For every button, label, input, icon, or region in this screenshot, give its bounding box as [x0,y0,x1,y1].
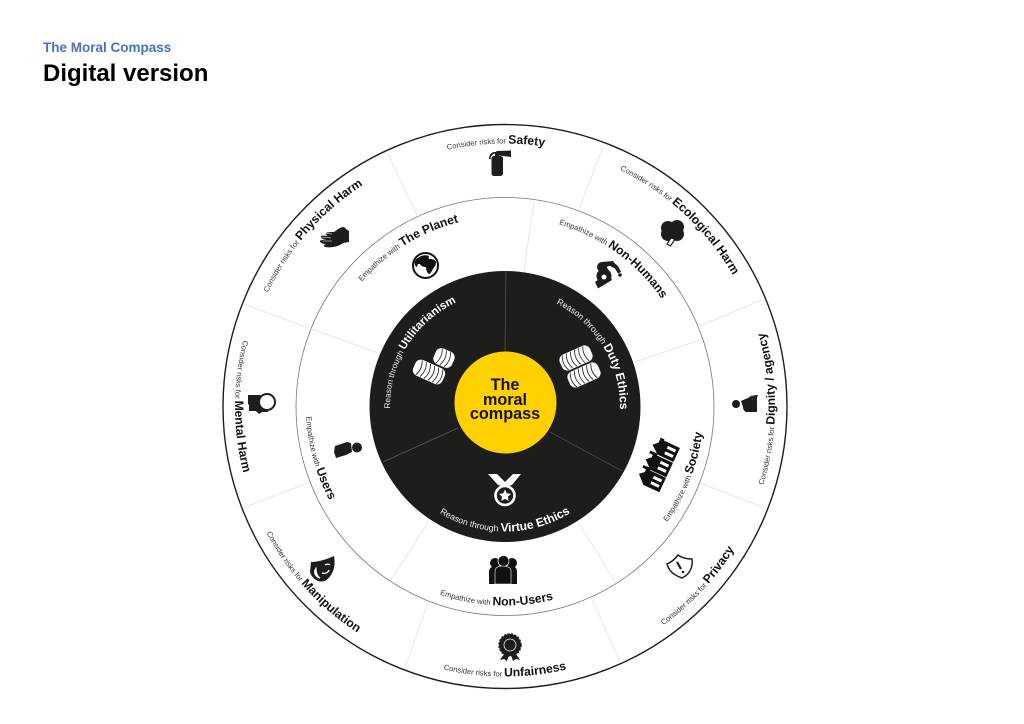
label: Physical Harm: Consider risks for Physical Harm [264,180,362,292]
label: Non-Users: Empathize with Non-Users [440,590,553,606]
icon: group of people [489,556,517,584]
label: Privacy: Consider risks for Privacy [661,546,734,624]
icon: robot arm [595,261,622,288]
icon: manipulation mask [310,556,335,582]
label: Ecological Harm: Consider risks for Ecological Harm [621,166,738,275]
centre: the moral compass: compass [470,405,540,423]
label: Manipulation: Consider risks for Manipulation [267,532,360,632]
icon: rosette [499,634,521,661]
label: The Planet: Empathize with The Planet [358,214,458,282]
icon: hand [320,227,349,247]
label: Virtue Ethics: Reason through Virtue Ethics [440,508,570,532]
subtitle: The Moral Compass [43,40,171,55]
label: Utilitarianism: Reason through Utilitarianism [384,298,456,408]
icon: globe [413,253,438,278]
centre: the moral compass: moral [483,391,527,409]
label: Users: Empathize with Users [306,416,334,500]
icon: tree [661,220,684,246]
title: Digital version [43,60,208,87]
label: Dignity / agency: Consider risks for Dignity / agency [758,334,778,484]
icon: medal [488,474,521,505]
icon: user [334,442,362,458]
icon: coins utilitarianism [411,346,457,386]
icon: privacy shield [667,555,692,578]
centre: the moral compass: The [491,376,519,394]
label: Safety: Consider risks for Safety [447,135,546,150]
label: Society: Empathize with Society [663,432,704,522]
icon: fire extinguisher [489,150,511,176]
centre: the moral compass [454,352,556,454]
label: Non-Humans: Empathize with Non-Humans [560,220,666,298]
label: Duty Ethics: Reason through Duty Ethics [556,298,628,409]
label: Mental Harm: Consider risks for Mental Harm [234,340,250,472]
icon: society houses [635,436,681,493]
icon: mental harm head [248,394,275,414]
panel: inner dark ring [370,271,640,542]
label: Unfairness: Consider risks for Unfairness [444,664,566,677]
icon: coins duty ethics [557,344,603,389]
icon: dignity person [732,395,758,412]
